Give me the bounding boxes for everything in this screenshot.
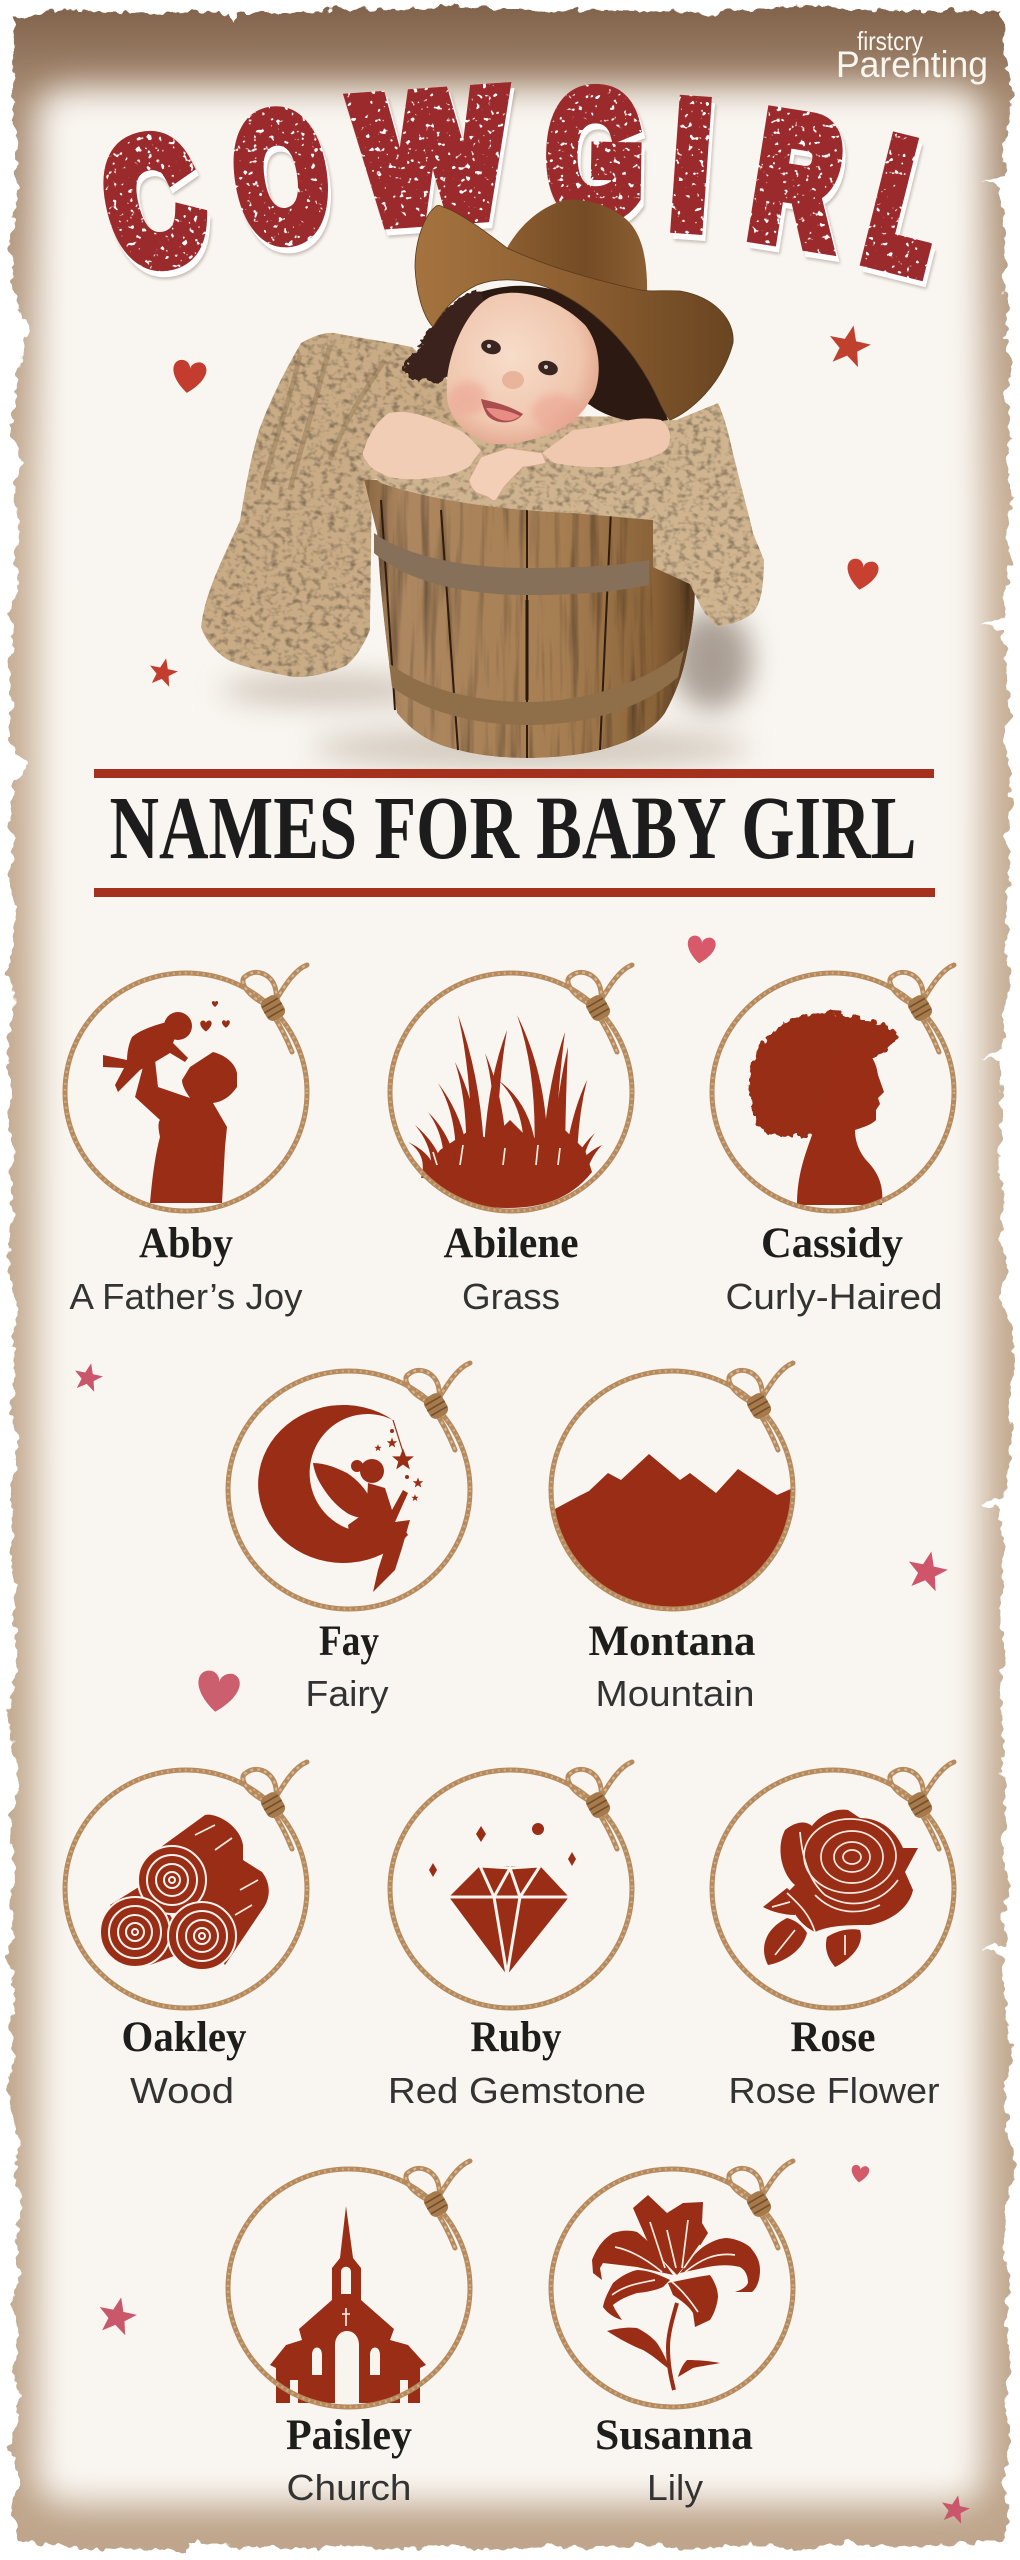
decoration: heart left of Fairy — [195, 1669, 241, 1715]
knitted blanket left — [201, 333, 470, 677]
decoration: small heart right of Susanna — [850, 2164, 870, 2184]
icon: diamond gemstone — [429, 1823, 576, 1975]
name: Ruby — [470, 2014, 562, 2061]
title: COWGIRL arched letters — [86, 56, 960, 307]
rope ring — [712, 965, 954, 1211]
name: Abby — [139, 1220, 233, 1267]
heading rule top — [94, 769, 934, 778]
logo: firstcry Parenting: Parenting — [836, 44, 988, 85]
name: Susanna — [595, 2412, 753, 2459]
decoration: star bottom right — [939, 2492, 972, 2525]
panel: Rose — [712, 1762, 954, 2111]
icon: lily flower — [592, 2195, 760, 2390]
fur rim and right drape — [355, 403, 764, 627]
title: COWGIRL arched letters: O — [222, 74, 340, 278]
cowboy hat — [415, 200, 733, 420]
title: COWGIRL arched letters: G — [547, 59, 643, 252]
meaning: Red Gemstone — [388, 2070, 646, 2111]
panel: Cassidy — [712, 965, 954, 1317]
heading rule bottom — [94, 888, 935, 897]
panel: Fay — [228, 1363, 470, 1714]
meaning: Rose Flower — [728, 2070, 940, 2111]
rope ring — [65, 1762, 307, 2008]
title: COWGIRL arched letters: R — [742, 78, 853, 281]
icon: father lifting baby — [103, 1001, 237, 1203]
panel: Ruby — [388, 1762, 646, 2111]
baby hair — [405, 286, 668, 422]
icon: grass — [408, 1015, 602, 1208]
icon: church — [270, 2206, 426, 2403]
panel: Montana — [551, 1363, 793, 1714]
panel: Abby — [65, 965, 307, 1317]
name: Paisley — [286, 2412, 412, 2459]
panel: Susanna — [551, 2161, 793, 2508]
decoration: heart top left — [170, 359, 207, 395]
icon: mountain — [553, 1454, 793, 1607]
name: Rose — [790, 2014, 876, 2061]
name: Montana — [588, 1618, 756, 1665]
icon: fairy on a crescent moon — [258, 1405, 423, 1592]
decoration: heart right of barrel — [844, 558, 880, 592]
decoration: heart above third column — [685, 935, 717, 965]
panel: Oakley — [65, 1762, 307, 2111]
meaning: Mountain — [596, 1673, 754, 1714]
rope ring — [228, 1363, 470, 1609]
rope ring — [390, 965, 632, 1211]
rope ring — [551, 1363, 793, 1609]
left arm — [363, 412, 481, 479]
rope ring — [228, 2161, 470, 2407]
baby face — [447, 293, 599, 444]
title: COWGIRL arched letters: L — [852, 106, 960, 307]
photo: baby in cowgirl hat in a wooden barrel — [201, 200, 764, 770]
icon: wood logs — [100, 1815, 269, 1970]
logo: firstcry Parenting — [836, 26, 988, 85]
baby hand — [469, 448, 546, 501]
rope ring — [65, 965, 307, 1211]
rope ring — [712, 1762, 954, 2008]
meaning: A Father’s Joy — [70, 1276, 302, 1317]
title: COWGIRL arched letters: I — [667, 67, 715, 262]
meaning: Curly-Haired — [726, 1276, 942, 1317]
meaning: Church — [286, 2467, 412, 2508]
name: Abilene — [444, 1220, 578, 1267]
title: COWGIRL arched letters: W — [352, 56, 512, 258]
right arm — [542, 418, 670, 467]
icon: curly-haired girl silhouette — [749, 1013, 897, 1205]
decoration: star left of Paisley — [95, 2293, 140, 2337]
meaning: Grass — [462, 1276, 560, 1317]
decoration: star left of Fay — [72, 1360, 105, 1393]
meaning: Lily — [647, 2467, 703, 2508]
name: Cassidy — [761, 1220, 903, 1267]
panel: Abilene — [390, 965, 632, 1317]
wooden barrel — [364, 480, 695, 758]
decoration: star top right — [825, 321, 874, 369]
title: COWGIRL arched letters: C — [86, 97, 220, 306]
meaning: Fairy — [306, 1673, 388, 1714]
meaning: Wood — [130, 2070, 234, 2111]
name: Oakley — [122, 2014, 247, 2061]
decoration: star left of barrel — [147, 655, 180, 688]
rope ring — [390, 1762, 632, 2008]
barrel shadow — [220, 610, 752, 770]
name: Fay — [319, 1618, 379, 1665]
logo: firstcry Parenting: firstcry — [857, 26, 923, 56]
panel: Paisley — [228, 2161, 470, 2508]
decoration: star right of Montana — [904, 1547, 951, 1593]
icon: rose flower — [763, 1810, 918, 1967]
rope ring — [551, 2161, 793, 2407]
